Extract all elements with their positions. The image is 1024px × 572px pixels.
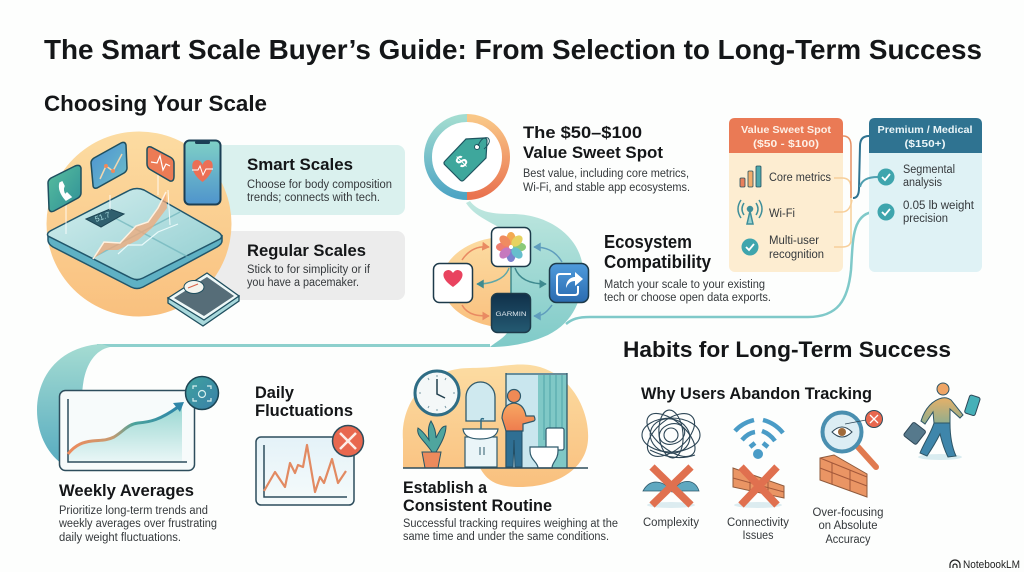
panel: value sweet spot tier: ($50 - $100) xyxy=(753,138,819,150)
panel: regular scales xyxy=(205,231,405,300)
text: value sweet spot description: Best value, including core metrics, xyxy=(523,168,689,180)
heading: value sweet spot xyxy=(523,123,663,162)
text: connectivity issues: Issues xyxy=(742,530,774,542)
heading: daily fluctuations: Fluctuations xyxy=(255,401,353,420)
heading: ecosystem compatibility xyxy=(604,232,711,272)
heading: establish a consistent routine: Consistent Routine xyxy=(403,496,552,515)
panel: regular scales: you have a pacemaker. xyxy=(247,277,359,289)
text: value sweet spot description xyxy=(523,168,690,194)
icon: regular bathroom scale xyxy=(168,273,239,326)
icon: share tile xyxy=(550,264,588,302)
heading: value sweet spot: The $50–$100 xyxy=(523,123,642,142)
text: connectivity issues: Connectivity xyxy=(727,517,789,529)
ecosystem app diagram xyxy=(434,228,588,332)
text: routine description: same time and under the same conditions. xyxy=(403,531,609,543)
text: ecosystem description xyxy=(604,279,771,304)
icon: garmin tile xyxy=(492,294,530,332)
icon: photos tile xyxy=(492,228,530,266)
icon: phone xyxy=(184,140,220,204)
connector: tier comparison bracket lines xyxy=(834,136,878,247)
icon: toilet xyxy=(530,428,564,468)
panel: regular scales: Regular Scales xyxy=(247,241,366,260)
icon: premium check 1 xyxy=(878,168,894,186)
text: routine description: Successful tracking requires weighing at the xyxy=(403,518,618,530)
icon: potted plant xyxy=(418,421,446,468)
icon: heartbeat app tile xyxy=(147,147,174,181)
chart: weekly averages xyxy=(60,376,218,470)
panel: premium / medical tier: ($150+) xyxy=(904,138,946,150)
text: complexity: Complexity xyxy=(643,517,699,529)
panel: premium / medical tier: Premium / Medical xyxy=(878,124,973,136)
heading: ecosystem compatibility: Compatibility xyxy=(604,252,711,272)
chart: daily fluctuations xyxy=(256,426,364,505)
heading: habits: Habits for Long-Term Success xyxy=(623,337,951,362)
person standing xyxy=(502,390,535,467)
icon: complexity scribble and crossed scale xyxy=(640,406,702,508)
text: ecosystem description: Match your scale to your existing xyxy=(604,279,765,291)
teal crescent behind weekly chart xyxy=(37,344,110,464)
panel: value sweet spot tier: Multi-user xyxy=(769,235,819,247)
flow line: from value section to lower section xyxy=(97,344,490,347)
text: weekly averages description: daily weight fluctuations. xyxy=(59,532,181,544)
icon: broken wi-fi and crossed wall xyxy=(733,420,784,508)
flow line: ecosystem to premium panel xyxy=(566,212,872,324)
panel: value sweet spot tier: Wi-Fi xyxy=(769,208,795,220)
text: ecosystem description: tech or choose open data exports. xyxy=(604,292,771,304)
heading: establish a consistent routine: Establish a xyxy=(403,478,488,497)
logo: notebooklm: NotebookLM xyxy=(963,559,1020,571)
icon: garmin tile: GARMIN xyxy=(496,311,527,318)
panel: premium / medical tier: precision xyxy=(903,213,948,225)
icon: wi-fi antenna xyxy=(738,200,762,224)
icon: x badge xyxy=(332,426,364,456)
panel: premium / medical tier: Segmental xyxy=(903,164,955,176)
heading: value sweet spot: Value Sweet Spot xyxy=(523,143,663,162)
panel: value sweet spot tier: recognition xyxy=(769,249,824,261)
panel: premium / medical tier: 0.05 lb weight xyxy=(903,200,975,212)
heading: ecosystem compatibility: Ecosystem xyxy=(604,232,692,252)
icon: lens badge xyxy=(186,376,218,410)
text: over-focusing: Accuracy xyxy=(826,534,871,546)
illustration: smart scale with floating app icons: 51.7 xyxy=(94,210,112,224)
icon: health tile xyxy=(434,264,472,302)
panel: value sweet spot tier: Core metrics xyxy=(769,172,831,184)
panel: value sweet spot tier: Value Sweet Spot xyxy=(741,124,832,136)
text: weekly averages description: weekly averages over frustrating xyxy=(58,518,217,530)
heading: daily fluctuations: Daily xyxy=(255,383,295,402)
text: over-focusing: on Absolute xyxy=(818,520,878,532)
teal flow connector from price tag into ecosystem blob xyxy=(466,201,583,347)
panel: premium / medical tier xyxy=(869,118,982,272)
panel: smart scales: Smart Scales xyxy=(247,155,353,174)
icon: price tag in gradient ring: $ xyxy=(452,151,472,172)
heading: daily fluctuations xyxy=(255,383,353,420)
icon: premium check 2 xyxy=(878,204,894,220)
icon: bars xyxy=(740,166,761,187)
icon: price tag in gradient ring xyxy=(428,118,506,196)
heading: choosing your scale: Choosing Your Scale xyxy=(44,91,267,116)
panel: smart scales xyxy=(205,145,405,215)
icon: magnifier over brick wall xyxy=(820,410,882,497)
panel: smart scales: trends; connects with tech. xyxy=(247,192,380,204)
icon: sink cabinet xyxy=(463,419,498,467)
panel: premium / medical tier: analysis xyxy=(903,177,942,189)
text: routine description xyxy=(403,518,618,543)
text: over-focusing: Over-focusing xyxy=(812,507,884,519)
panel: regular scales: Stick to for simplicity or if xyxy=(247,264,371,276)
heading: establish a consistent routine xyxy=(403,478,552,515)
heading: why users abandon tracking: Why Users Abandon Tracking xyxy=(641,384,872,403)
icon: trend app tile xyxy=(91,142,127,188)
text: over-focusing xyxy=(812,507,884,546)
icon: check xyxy=(742,238,758,256)
text: weekly averages description: Prioritize long-term trends and xyxy=(59,505,208,517)
icon: clock xyxy=(415,371,459,415)
text: weekly averages description xyxy=(58,505,217,544)
text: connectivity issues xyxy=(727,517,789,542)
text: value sweet spot description: Wi-Fi, and stable app ecosystems. xyxy=(523,182,690,194)
heading: weekly averages: Weekly Averages xyxy=(59,481,194,500)
illustration: consistent bathroom routine xyxy=(403,365,588,487)
panel: value sweet spot tier xyxy=(729,118,843,272)
title: The Smart Scale Buyer’s Guide: From Selection to Long-Term Success xyxy=(44,34,982,65)
panel: smart scales: Choose for body composition xyxy=(247,179,392,191)
icon: person walking away xyxy=(903,383,981,460)
icon: mirror xyxy=(466,382,495,421)
icon: phone app tile xyxy=(48,165,81,212)
illustration: smart scale with floating app icons xyxy=(46,132,239,326)
icon: shower and curtain xyxy=(506,373,567,468)
